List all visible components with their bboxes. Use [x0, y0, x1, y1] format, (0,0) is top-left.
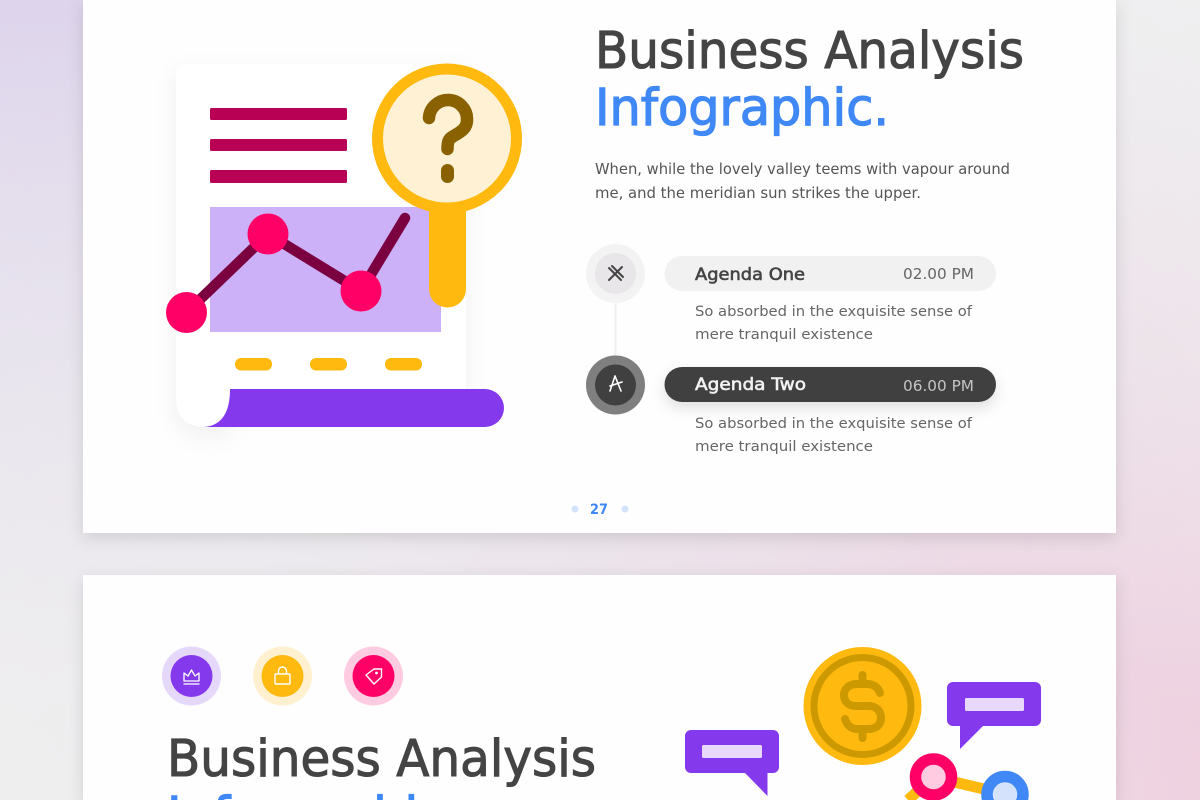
speech bubble left: [685, 730, 779, 796]
description: When, while the lovely valley teems with vapour around: [595, 160, 1010, 178]
icon: dollar coin: [804, 647, 922, 765]
icon: pencil and ruler: [586, 244, 645, 303]
network node pink: [916, 759, 952, 795]
illustration: report with magnifier: [166, 64, 516, 427]
title: [595, 21, 1024, 137]
agenda one description: So absorbed in the exquisite sense of: [695, 304, 973, 320]
network node blue: [987, 776, 1023, 800]
title: Business Analysis: [595, 21, 1024, 80]
agenda two description: So absorbed in the exquisite sense of: [695, 416, 973, 432]
network connectors: [904, 777, 984, 800]
agenda one description: mere tranquil existence: [695, 327, 873, 343]
agenda two description: [695, 416, 973, 455]
title: Business Analysis: [167, 729, 596, 788]
agenda one time: 02.00 PM: [903, 265, 974, 283]
agenda two time: 06.00 PM: [903, 377, 974, 395]
chart background: [210, 207, 441, 332]
agenda two pill: [664, 367, 996, 402]
agenda two description: mere tranquil existence: [695, 439, 873, 455]
icon: shopping bag: [253, 646, 312, 706]
agenda one description: [695, 304, 973, 343]
icon: price tag: [344, 646, 403, 706]
page number: 27: [590, 502, 608, 518]
panel: business analysis slide 27: [83, 0, 1116, 533]
description: [595, 160, 1010, 202]
panel: second slide: [83, 575, 1116, 800]
page number: [572, 504, 628, 514]
agenda two label: Agenda Two: [695, 375, 806, 394]
title: Infographic.: [595, 78, 889, 137]
description: me, and the meridian sun strikes the upper.: [595, 184, 921, 202]
report paper: [185, 422, 222, 432]
agenda one label: Agenda One: [695, 265, 805, 284]
illustration: coin and network: [685, 647, 1041, 800]
icon: compass: [586, 356, 645, 414]
timeline connector: [614, 300, 616, 358]
magnifier: [378, 69, 516, 308]
question mark: [429, 100, 467, 149]
icon: crown: [162, 646, 221, 706]
paper scroll base: [204, 389, 504, 427]
agenda one pill: [664, 256, 996, 291]
speech bubble right: [947, 682, 1041, 749]
agenda two: [586, 356, 996, 455]
agenda one: [586, 244, 996, 343]
line chart: [166, 214, 405, 333]
text lines: [210, 108, 347, 183]
axis dashes: [235, 358, 422, 370]
title: [171, 737, 594, 800]
